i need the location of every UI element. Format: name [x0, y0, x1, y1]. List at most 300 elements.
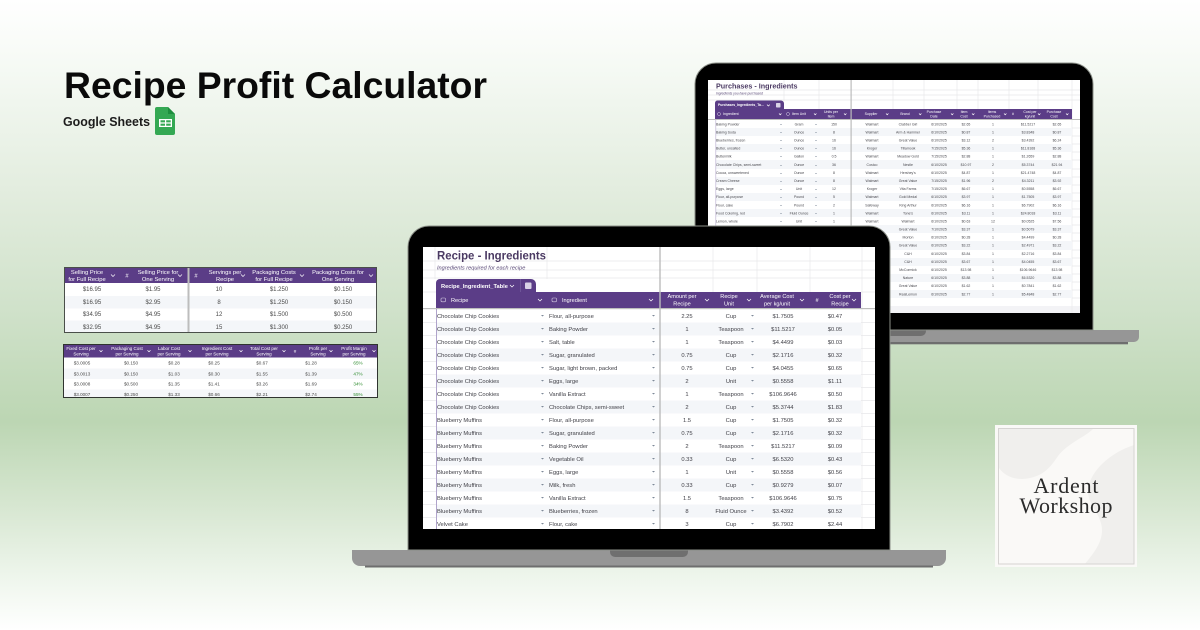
table header: Servings per [209, 270, 241, 276]
data rows: Eggs, large [549, 379, 578, 385]
data rows: 2 [685, 379, 689, 385]
data rows: $1.7505 [773, 418, 793, 424]
data rows: $11.5217 [771, 444, 795, 450]
table tab: Purchases_Ingredients_Ta... [718, 103, 764, 107]
data rows: Unit [726, 470, 737, 476]
table rows: $1.41 [208, 382, 220, 387]
data rows: Flour, cake [549, 522, 577, 528]
data rows: 6/10/2025 [931, 130, 947, 134]
data rows: Cup [726, 431, 736, 437]
spreadsheet screen [423, 247, 875, 529]
table header: Recipe [451, 298, 468, 304]
data rows: 1 [992, 211, 994, 215]
table header [65, 268, 376, 283]
table rows: 47% [353, 372, 363, 376]
table rows: $0.30 [208, 372, 220, 376]
data rows: Gallon [794, 155, 804, 159]
data rows: Great Value [899, 284, 917, 288]
data rows: 7/15/2025 [931, 155, 947, 159]
table header: per Serving [115, 352, 139, 356]
data rows: $4.0455 [1022, 260, 1034, 264]
data rows: Great Value [899, 179, 917, 183]
data rows: Cream Cheese [716, 179, 740, 183]
data rows: $7.56 [1053, 220, 1061, 224]
data rows: Cup [726, 405, 736, 411]
data rows: Unit [796, 187, 802, 191]
data rows: 5 [833, 195, 835, 199]
data rows: 7/15/2025 [931, 187, 947, 191]
table rows: $2.95 [145, 300, 161, 306]
data rows: $3.84 [962, 252, 970, 256]
data rows: $0.87 [962, 130, 970, 134]
laptop bezel [695, 63, 1093, 330]
row stripes [716, 128, 1072, 298]
data rows: $0.7841 [1022, 284, 1034, 288]
data rows: 2 [685, 444, 689, 450]
data rows: $106.9646 [769, 496, 797, 502]
data rows: $0.75 [828, 496, 842, 502]
data rows: Flour, cake [716, 203, 733, 207]
data rows: Sugar, light brown, packed [549, 366, 617, 372]
table header: Cost [1050, 114, 1058, 118]
data rows: Blueberry Muffins [437, 496, 482, 502]
data rows: 150 [831, 122, 837, 126]
data rows: Blueberry Muffins [437, 444, 482, 450]
data rows: 1 [833, 220, 835, 224]
data rows: 8 [833, 130, 835, 134]
data rows: $3.92 [1053, 179, 1061, 183]
data rows: Walmart [902, 220, 914, 224]
data rows: $3.88 [1053, 276, 1061, 280]
data rows: $1.7505 [773, 314, 793, 320]
data rows: 1.5 [683, 418, 691, 424]
data rows: Fluid Ounce [715, 509, 747, 515]
data rows: Chocolate Chip Cookies [437, 327, 499, 333]
data rows: 6/10/2025 [931, 260, 947, 264]
subtitle: Google Sheets: Google Sheets [63, 114, 150, 129]
data rows: $6.7902 [773, 522, 793, 528]
table rows: $0.500 [334, 312, 353, 318]
table rows: $1.500 [270, 312, 289, 318]
icon: Google Sheets logo [155, 107, 175, 135]
data rows: 7/10/2025 [931, 228, 947, 232]
data rows: Blueberries, frozen [549, 509, 598, 515]
data rows: Walmart [866, 138, 878, 142]
data rows: Vegetable Oil [549, 457, 583, 463]
panel: front laptop, Recipe - Ingredients [352, 226, 946, 568]
table rows: $1.69 [305, 382, 317, 387]
panel: pricing table [64, 268, 376, 332]
data rows: Ounce [794, 147, 804, 151]
table header: Amount per [668, 294, 697, 300]
row stripes [437, 322, 861, 518]
table header: # [294, 349, 297, 354]
data rows: $6.7902 [1022, 203, 1034, 207]
data rows: Flour, all-purpose [716, 195, 743, 199]
data rows: $1.7505 [1022, 195, 1034, 199]
data rows: 2 [992, 138, 994, 142]
table rows: $0.66 [208, 392, 220, 397]
data rows: 1 [992, 252, 994, 256]
data rows: Chocolate Chips, semi-sweet [716, 163, 761, 167]
logo: Ardent Workshop: Ardent [1034, 473, 1098, 498]
table rows: $3.0008 [74, 382, 91, 387]
data rows: $3.12 [962, 138, 970, 142]
table header: Item Unit [792, 112, 806, 116]
data rows: Unit [726, 379, 737, 385]
data rows: 1 [992, 195, 994, 199]
title: Recipe Profit Calculator [64, 65, 487, 106]
data rows: Walmart [866, 195, 878, 199]
table header: Cost per [829, 294, 851, 300]
data rows: 16 [832, 138, 836, 142]
table header: Cost [960, 114, 968, 118]
data rows: Walmart [866, 211, 878, 215]
data rows: $4.87 [1053, 171, 1061, 175]
data rows: McCormick [899, 268, 917, 272]
data rows: Butter, unsalted [716, 147, 740, 151]
table rows: $34.95 [83, 312, 102, 318]
data rows: Milk, fresh [549, 483, 575, 489]
table header: for Full Recipe [68, 277, 106, 283]
panel: profit table [64, 344, 378, 398]
data rows: 0.75 [681, 431, 693, 437]
data rows: 6/10/2025 [931, 284, 947, 288]
data rows: Baking Powder [716, 122, 740, 126]
table rows: $0.67 [256, 361, 268, 366]
table header: Ingredient [723, 112, 739, 116]
data rows: 1 [833, 211, 835, 215]
spreadsheet screen [708, 80, 1080, 313]
data rows: Chocolate Chip Cookies [437, 405, 499, 411]
table header: per kg/unit [764, 302, 791, 308]
data rows: 8 [685, 509, 689, 515]
table header: Packaging Costs for [312, 270, 364, 276]
data rows: Walmart [866, 179, 878, 183]
data rows: $0.63 [962, 220, 970, 224]
data rows: Great Value [899, 244, 917, 248]
table header: Serving [256, 352, 272, 356]
data rows: 0.33 [681, 483, 693, 489]
table rows: $1.300 [270, 325, 289, 331]
data rows: 12 [991, 220, 995, 224]
table header: Selling Price for [138, 270, 178, 276]
data rows: 1 [992, 268, 994, 272]
data rows: 6/10/2025 [931, 122, 947, 126]
table header [715, 109, 1072, 119]
data rows: $3.84 [1053, 252, 1061, 256]
data rows: 6/10/2025 [931, 195, 947, 199]
data rows: 7/15/2025 [931, 147, 947, 151]
data rows: $11.8168 [1021, 147, 1035, 151]
data rows: $1.62 [962, 284, 970, 288]
table header: Profit Margin [341, 346, 367, 351]
data rows: $2.44 [828, 522, 843, 528]
table header: Item [961, 110, 967, 114]
data rows: $0.03 [828, 340, 842, 346]
table rows: $1.33 [168, 392, 180, 397]
data rows: Flour, all-purpose [549, 314, 594, 320]
sheet subheading: Ingredients required for each recipe [437, 266, 525, 272]
data rows: 1 [992, 147, 994, 151]
table header: Recipe [720, 294, 738, 300]
table rows: $2.74 [305, 392, 317, 397]
panel: back laptop, Purchases - Ingredients [648, 63, 1139, 344]
table header: Profit per [309, 346, 328, 351]
table rows: $0.500 [124, 382, 138, 387]
table rows: $1.95 [145, 287, 161, 293]
data rows: $0.07 [828, 483, 842, 489]
table header: # [815, 298, 819, 304]
data rows: Walmart [866, 122, 878, 126]
data rows: $3.67 [1053, 260, 1061, 264]
data rows: 1 [992, 244, 994, 248]
data rows: Cocoa, unsweetened [716, 171, 749, 175]
data rows: $0.47 [828, 314, 842, 320]
data rows: $3.11 [1053, 211, 1061, 215]
table header: Packaging Costs [252, 270, 296, 276]
data rows: $11.5217 [771, 327, 795, 333]
data rows: 1 [992, 130, 994, 134]
data rows: $21.94 [1052, 163, 1062, 167]
data rows: Eggs, large [549, 470, 578, 476]
table header: Units per [824, 110, 839, 114]
data rows: 6/10/2025 [931, 276, 947, 280]
data rows: 6/10/2025 [931, 244, 947, 248]
data rows: Velvet Cake [437, 522, 468, 528]
data rows: 2 [992, 163, 994, 167]
table header: per Serving [342, 352, 366, 356]
table header: Purchase [1047, 110, 1061, 114]
data rows: $1.62 [1053, 284, 1061, 288]
data rows: 1 [992, 260, 994, 264]
data rows: 3 [685, 522, 689, 528]
data rows: Food Coloring, red [716, 211, 745, 215]
data rows: $2.88 [1053, 155, 1061, 159]
data rows: Ounce [794, 179, 804, 183]
data rows: 6/10/2025 [931, 220, 947, 224]
data rows: Great Value [899, 138, 917, 142]
data rows: 2 [992, 179, 994, 183]
data rows: $0.5558 [1022, 187, 1034, 191]
data rows: Blueberry Muffins [437, 470, 482, 476]
data rows: $3.97 [1053, 195, 1061, 199]
data rows: $0.28 [962, 236, 970, 240]
table header: Items [988, 110, 997, 114]
data rows: Cup [726, 457, 736, 463]
table rows: $4.95 [145, 312, 161, 318]
data rows: Walmart [866, 171, 878, 175]
data rows: 1 [992, 187, 994, 191]
table header: # [1012, 112, 1014, 116]
table rows: $0.250 [124, 392, 138, 397]
table header: Date [930, 114, 938, 118]
data rows: 6/10/2025 [931, 252, 947, 256]
data rows: $13.98 [961, 268, 971, 272]
data rows: Pound [794, 195, 804, 199]
data rows: $3.11 [962, 211, 970, 215]
data rows: 1 [992, 155, 994, 159]
table header: # [194, 274, 198, 280]
table rows: $32.95 [83, 325, 102, 331]
data rows: $2.77 [962, 292, 970, 296]
data rows: 12 [832, 187, 836, 191]
table header: Labor Cost [158, 346, 181, 351]
data rows: Safeway [865, 203, 879, 207]
table header: per Serving [157, 352, 181, 356]
table rows: $1.03 [168, 372, 180, 376]
data rows: 2 [685, 405, 689, 411]
data rows: $0.50 [828, 392, 842, 398]
data rows: Chocolate Chip Cookies [437, 366, 499, 372]
table rows: $1.250 [270, 287, 289, 293]
data rows: 2.25 [681, 314, 693, 320]
data rows: Blueberry Muffins [437, 483, 482, 489]
table header: Item [828, 114, 834, 118]
table rows: $0.25 [208, 361, 220, 366]
sheet subheading: Ingredients you have purchased [716, 92, 763, 96]
data rows: Cup [726, 353, 736, 359]
data rows: $0.0525 [1022, 220, 1034, 224]
data rows: Fluid Ounce [790, 211, 808, 215]
data rows: Chocolate Chip Cookies [437, 379, 499, 385]
table header: kg/unit [1025, 114, 1035, 118]
table header: Recipe [831, 302, 849, 308]
table rows: $0.250 [334, 325, 353, 331]
table tab: Recipe_Ingredient_Table [441, 284, 508, 290]
data rows: Ounce [794, 171, 804, 175]
data rows: Salt, table [549, 340, 575, 346]
data rows: 0.5 [832, 155, 836, 159]
data rows: 16 [832, 147, 836, 151]
data rows: $2.4971 [1022, 244, 1034, 248]
data rows: Chocolate Chip Cookies [437, 340, 499, 346]
table header: Total Cost per [250, 346, 278, 351]
table tab [715, 100, 784, 109]
data rows: $0.56 [828, 470, 842, 476]
data rows: Nestle [903, 163, 913, 167]
data rows: Blueberry Muffins [437, 418, 482, 424]
data rows: Teaspoon [718, 444, 744, 450]
data rows: 1 [992, 236, 994, 240]
data rows: $5.3744 [773, 405, 794, 411]
data rows: 0.75 [681, 353, 693, 359]
table rows: $0.150 [124, 361, 138, 366]
data rows: $6.16 [1053, 203, 1061, 207]
table header: Recipe [673, 302, 691, 308]
table header [64, 345, 377, 358]
data rows: $6.5320 [1022, 276, 1034, 280]
table header: Brand [900, 112, 910, 116]
data rows: Ounce [794, 138, 804, 142]
data rows: $0.32 [828, 353, 842, 359]
data rows: Chocolate Chips, semi-sweet [549, 405, 624, 411]
data rows: $4.4499 [773, 340, 793, 346]
data rows: Lemon, whole [716, 220, 738, 224]
data rows: $4.3211 [1022, 179, 1034, 183]
data rows: Baking Powder [549, 444, 588, 450]
data rows: 8 [833, 171, 835, 175]
data rows: $0.09 [828, 444, 842, 450]
table header: One Serving [142, 277, 174, 283]
table header: Ingredient Cost [202, 346, 233, 351]
data rows: 6/10/2025 [931, 138, 947, 142]
data rows: Tone's [903, 211, 913, 215]
data rows: Cup [726, 418, 736, 424]
table rows: $0.150 [124, 372, 138, 376]
data rows: $0.5558 [773, 470, 793, 476]
data rows: $24.8018 [1021, 211, 1035, 215]
table rows: 34% [353, 382, 363, 387]
data rows: 8 [833, 179, 835, 183]
data rows: 2 [833, 203, 835, 207]
data rows: Walmart [866, 130, 878, 134]
table rows: $1.55 [256, 372, 268, 376]
table header: Ingredient [562, 298, 587, 304]
data rows: $1.2659 [1022, 155, 1034, 159]
sheet heading: Purchases - Ingredients [716, 82, 797, 90]
data rows: $6.24 [1053, 138, 1061, 142]
data rows: $3.37 [1053, 228, 1061, 232]
data rows: 1 [992, 171, 994, 175]
data rows: $106.9646 [1020, 268, 1036, 272]
data rows: $6.67 [1053, 187, 1061, 191]
table rows: $16.95 [83, 300, 102, 306]
data rows: $0.05 [828, 327, 842, 333]
data rows: RealLemon [899, 292, 917, 296]
table rows: 55% [353, 392, 363, 397]
data rows: $0.28 [1053, 236, 1061, 240]
data rows: Kroger [867, 147, 878, 151]
table header: One Serving [322, 277, 354, 283]
data rows: 6/10/2025 [931, 292, 947, 296]
data rows: $10.97 [961, 163, 971, 167]
logo: Ardent Workshop: Workshop [1020, 493, 1112, 518]
table header: for Full Recipe [255, 277, 293, 283]
data rows: Cup [726, 314, 736, 320]
table rows: $1.35 [168, 382, 180, 387]
data rows: 6/10/2025 [931, 268, 947, 272]
laptop bezel [408, 226, 890, 550]
data rows: 1 [685, 392, 689, 398]
table rows [83, 287, 353, 331]
data rows: Pound [794, 203, 804, 207]
data rows: $2.1716 [773, 353, 793, 359]
data rows: $3.4392 [773, 509, 793, 515]
data rows: King Arthur [899, 203, 917, 207]
table rows: $1.250 [270, 300, 289, 306]
data rows: $3.67 [962, 260, 970, 264]
table header: Average Cost [760, 294, 794, 300]
table rows: $16.95 [83, 287, 102, 293]
data rows: $0.9279 [773, 483, 793, 489]
data rows: Ounce [794, 163, 804, 167]
data rows: Vita Farms [900, 187, 917, 191]
table header: Unit [724, 302, 734, 308]
data rows: Sugar, granulated [549, 353, 595, 359]
table rows: $0.150 [334, 287, 353, 293]
table header: Packaging Cost [111, 346, 144, 351]
laptop base [648, 330, 1139, 344]
data rows: Blueberry Muffins [437, 457, 482, 463]
data rows: 36 [832, 163, 836, 167]
data rows: Chocolate Chip Cookies [437, 353, 499, 359]
data rows: C&H [904, 252, 912, 256]
data rows: Flour, all-purpose [549, 418, 594, 424]
data rows: Unit [796, 220, 802, 224]
data rows: Chocolate Chip Cookies [437, 314, 499, 320]
data rows: 1 [685, 327, 689, 333]
